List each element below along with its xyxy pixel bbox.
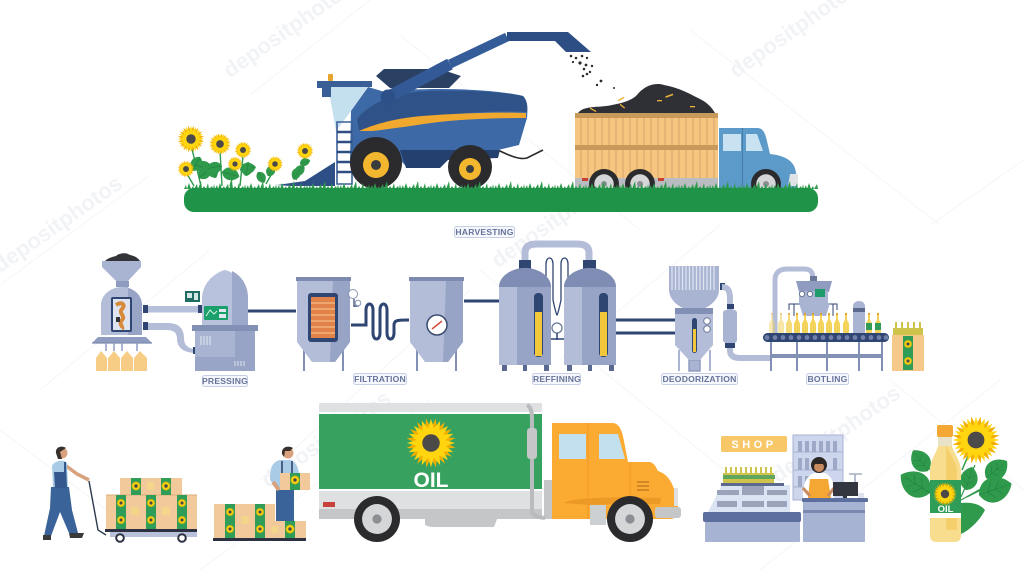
connection pipes (143, 305, 296, 354)
panel: deodorization unit (669, 266, 772, 371)
panel: pressing machines (92, 253, 296, 371)
panel: bottling line (763, 269, 924, 371)
large sunflower (948, 412, 1004, 470)
shop sign: SHOP (731, 439, 777, 451)
vessel left (499, 260, 551, 371)
label: pressing: PRESSING (202, 376, 248, 386)
panel: delivery truck (319, 403, 681, 542)
vessel right (564, 260, 616, 371)
cash desk and monitor (802, 474, 868, 542)
press tank and base (185, 270, 258, 371)
panel: filtration tanks (296, 277, 500, 371)
pallet with boxes (213, 504, 306, 541)
label: deodorization: DEODORIZATION (662, 374, 737, 384)
truck wheels (354, 496, 653, 542)
label: refining: REFFINING (533, 374, 581, 384)
bottle label text: OIL (938, 504, 954, 515)
u-coil and gauge (546, 258, 568, 340)
press machine with hopper (92, 253, 152, 371)
panel: warehouse worker with cart (43, 447, 197, 542)
panel: oil bottle with sunflower (894, 412, 1016, 542)
grass ground (184, 180, 818, 212)
worker pulling cart (43, 447, 106, 540)
cart platform (105, 529, 197, 542)
watermark: depositphotos (256, 385, 395, 493)
panel: worker stacking boxes (213, 447, 310, 541)
second tank with gauge (409, 277, 464, 371)
arch pipe (525, 244, 589, 262)
stacked boxes on cart (106, 478, 197, 529)
combine harvester (277, 32, 591, 189)
bottles on conveyor (769, 301, 881, 333)
label: bottling: BOTLING (807, 374, 848, 384)
panel: refining vessels (499, 244, 675, 371)
filling head (789, 276, 837, 316)
panel: shop (703, 435, 868, 542)
cashier (803, 457, 834, 498)
gauge and coil (348, 290, 409, 339)
watermark: depositphotos (766, 380, 905, 488)
truck logo sunflower (402, 414, 460, 472)
shelves (793, 435, 843, 500)
display case (703, 467, 801, 542)
label: harvesting: HARVESTING (455, 227, 514, 237)
filter tank (296, 277, 351, 371)
label: filtration: FILTRATION (354, 374, 406, 384)
watermark: depositphotos (486, 165, 625, 273)
falling seeds (570, 55, 615, 89)
worker holding box (270, 447, 310, 521)
packed box of bottles (892, 322, 924, 371)
panel: harvesting scene (175, 32, 818, 212)
truck logo text: OIL (414, 469, 449, 492)
shop sign (721, 436, 787, 452)
sunflower plants (175, 123, 315, 186)
grain trailer and truck (575, 84, 798, 199)
leaves (894, 445, 1016, 534)
conveyor (763, 333, 889, 371)
